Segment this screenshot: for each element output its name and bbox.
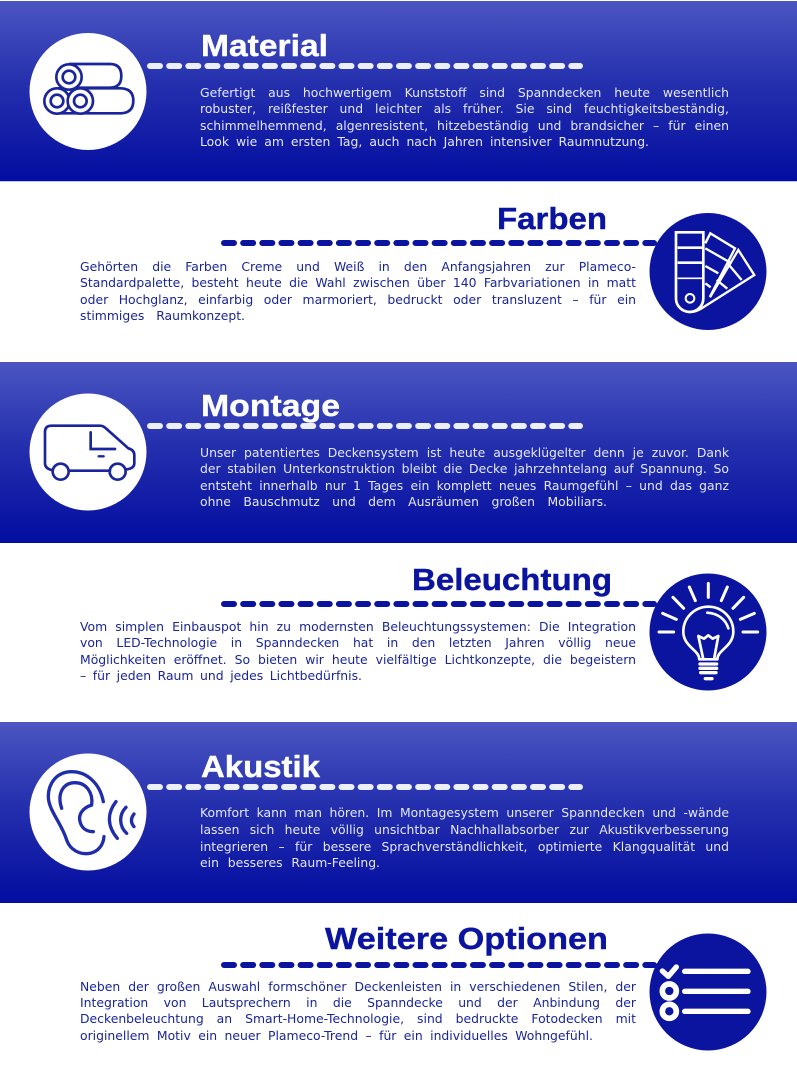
heading: Beleuchtung: Beleuchtung xyxy=(412,562,612,597)
text block: Weitere Optionen: originellem Motiv ein neuer Plameco-Trend – für ein individuelles Wohngefühl. xyxy=(80,1028,593,1043)
text block: Beleuchtung xyxy=(80,619,636,683)
panel background: Montage xyxy=(0,362,797,543)
heading: Weitere Optionen: Weitere Optionen xyxy=(325,921,608,956)
text block: Akustik xyxy=(200,805,729,870)
text block: Farben: Gehörten die Farben Creme und Weiß in den Anfangsjahren zur Plameco- xyxy=(80,259,636,274)
text block: Akustik: integrieren – für bessere Sprachverständlichkeit, optimierte Klangqualität und xyxy=(200,839,729,854)
text block: Akustik: lassen sich heute völlig unsichtbar Nachhallabsorber zur Akustikverbesserung xyxy=(200,822,729,837)
text block: Akustik: ein besseres Raum-Feeling. xyxy=(200,855,380,870)
text block: Material: Gefertigt aus hochwertigem Kunststoff sind Spanndecken heute wesentlich xyxy=(200,85,729,100)
connector: Montage xyxy=(150,423,580,429)
text block: Farben: Standardpalette, besteht heute die Wahl zwischen über 140 Farbvariationen in matt xyxy=(80,275,636,290)
text block: Material: robuster, reißfester und leichter als früher. Sie sind feuchtigkeitsbeständig, xyxy=(200,101,729,116)
panel background: Akustik xyxy=(0,722,797,903)
text block: Montage: Unser patentiertes Deckensystem ist heute ausgeklügelter denn je zuvor. Dank xyxy=(200,445,729,460)
text block: Beleuchtung: – für jeden Raum und jedes Lichtbedürfnis. xyxy=(80,668,362,683)
icon: checklist xyxy=(650,934,766,1050)
icon: material rolls xyxy=(30,33,146,150)
text block: Farben: oder Hochglanz, einfarbig oder marmoriert, bedruckt oder transluzent – für ein xyxy=(80,292,636,307)
connector: Akustik xyxy=(150,784,580,790)
heading: Montage: Montage xyxy=(201,388,340,423)
text block: Weitere Optionen xyxy=(80,979,636,1043)
text block: Montage: der stabilen Unterkonstruktion bleibt die Decke jahrzehntelang auf Spannung. So xyxy=(200,461,729,476)
connector: Material xyxy=(150,63,580,69)
text block: Beleuchtung: Möglichkeiten eröffnet. So bieten wir heute vielfältige Lichtkonzepte, die begeistern xyxy=(80,652,636,667)
icon: light bulb xyxy=(650,574,766,690)
connector: Beleuchtung xyxy=(224,601,654,607)
text block: Weitere Optionen: Neben der großen Auswahl formschöner Deckenleisten in verschiedenen Stilen, der xyxy=(80,979,636,994)
text block: Weitere Optionen: Deckenbeleuchtung an Smart-Home-Technologie, sind bedruckte Fotodecken mit xyxy=(80,1011,636,1026)
connector: Weitere Optionen xyxy=(224,962,654,968)
text block: Montage xyxy=(200,445,729,509)
heading: Akustik: Akustik xyxy=(201,749,321,784)
panel background: Material xyxy=(0,1,797,182)
text block: Material xyxy=(200,85,729,149)
icon: van xyxy=(30,394,146,510)
text block: Weitere Optionen: Integration von Lautsprechern in die Spanndecke und der Anbindung der xyxy=(80,995,636,1010)
text block: Montage: entsteht innerhalb nur 1 Tages ein komplett neues Raumgefühl – und das ganz xyxy=(200,478,729,493)
text block: Beleuchtung: von LED-Technologie in Spanndecken hat in den letzten Jahren völlig neue xyxy=(80,635,636,650)
text block: Farben: stimmiges Raumkonzept. xyxy=(80,308,245,323)
text block: Beleuchtung: Vom simplen Einbauspot hin zu modernsten Beleuchtungssystemen: Die Integration xyxy=(80,619,636,634)
icon: colour fan xyxy=(650,213,766,330)
icon: ear with sound waves xyxy=(30,754,146,870)
heading: Material: Material xyxy=(201,28,328,63)
connector: Farben xyxy=(224,240,654,246)
text block: Montage: ohne Bauschmutz und dem Ausräumen großen Mobiliars. xyxy=(200,494,607,509)
text block: Material: Look wie am ersten Tag, auch nach Jahren intensiver Raumnutzung. xyxy=(200,134,649,149)
heading: Farben: Farben xyxy=(497,201,607,236)
text block: Akustik: Komfort kann man hören. Im Montagesystem unserer Spanndecken und -wände xyxy=(200,805,729,820)
text block: Farben xyxy=(80,259,636,323)
text block: Material: schimmelhemmend, algenresistent, hitzebeständig und brandsicher – für einen xyxy=(200,118,729,133)
